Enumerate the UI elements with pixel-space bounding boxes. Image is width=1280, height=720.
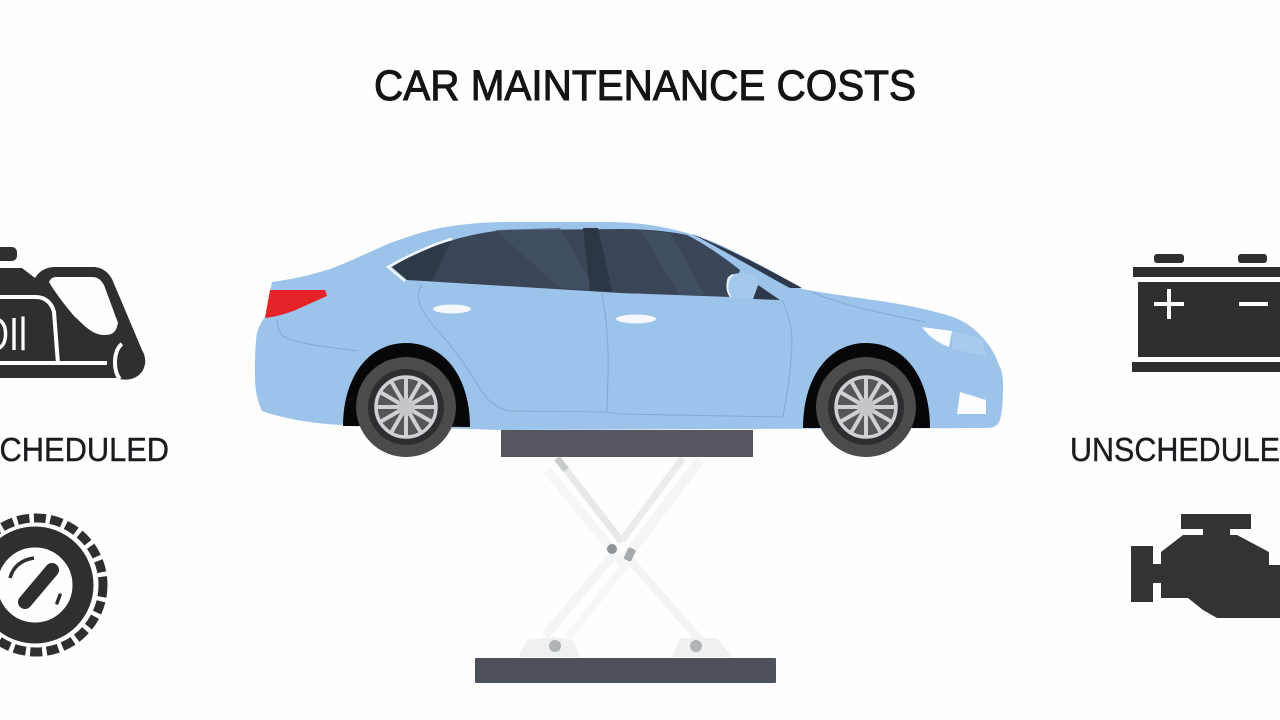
front door handle <box>616 314 656 324</box>
front quarter window <box>753 285 780 300</box>
headlight <box>922 327 986 356</box>
rear wheel <box>356 357 456 457</box>
icon: oil can <box>0 247 145 380</box>
fog light <box>957 392 986 414</box>
lift: base plate <box>475 658 776 683</box>
lift: scissor mechanism <box>518 458 733 657</box>
icon: battery <box>1132 254 1280 372</box>
front wheel <box>816 357 916 457</box>
window trim <box>388 239 452 281</box>
lift: top platform <box>501 430 753 457</box>
car <box>255 222 1003 457</box>
car body <box>255 222 1003 430</box>
icon: engine <box>1131 514 1280 618</box>
rear door handle <box>433 304 471 314</box>
icon: tire <box>0 518 103 652</box>
taillight <box>265 290 327 318</box>
title: CAR MAINTENANCE COSTS <box>374 62 916 110</box>
side mirror <box>727 273 758 299</box>
window reflections <box>392 228 705 295</box>
rear wheel arch <box>343 343 470 427</box>
door lines <box>277 285 925 417</box>
windshield <box>692 234 802 288</box>
front wheel arch <box>803 343 930 428</box>
side windows <box>392 229 740 297</box>
